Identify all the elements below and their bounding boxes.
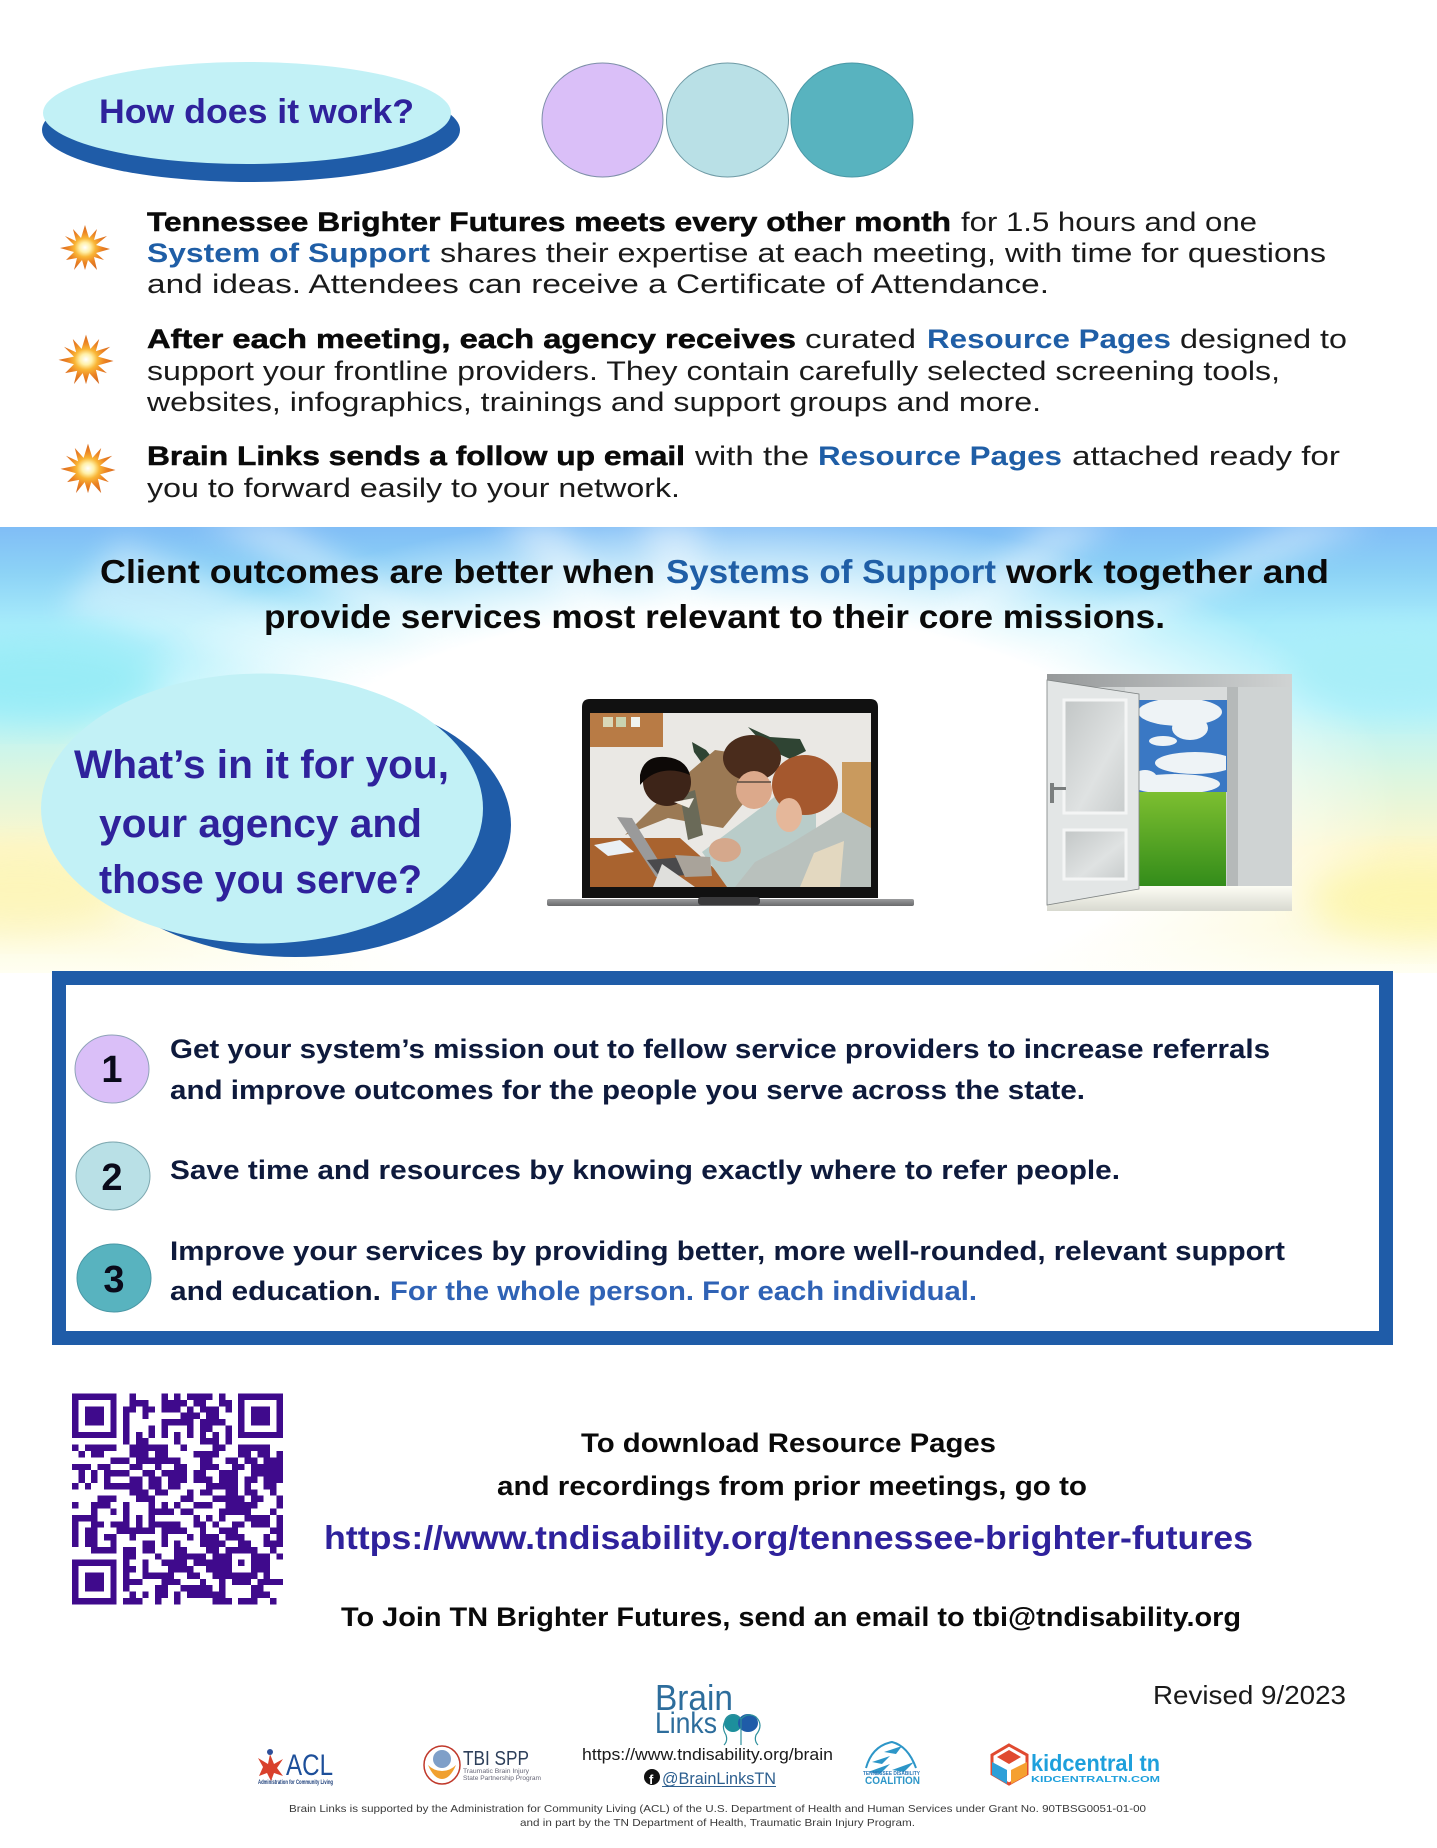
laptop base (547, 899, 914, 906)
resources call to action: To Join TN Brighter Futures, send an email to tbi@tndisability.org (341, 1602, 1241, 1632)
sky background band (0, 527, 1437, 973)
callout text: What’s in it for you, (74, 743, 449, 787)
icon: facebook (644, 1769, 660, 1787)
clouds (1139, 700, 1226, 792)
logo: kidcentral tn: kidcentral tn (1031, 1750, 1160, 1776)
Brain Links website and Facebook: https://www.tndisability.org/brain (582, 1745, 833, 1764)
benefit 2 (76, 1142, 1120, 1210)
logo: TBI SPP: TBI SPP (463, 1748, 529, 1770)
callout text (74, 743, 449, 902)
revision date: Revised 9/2023 (1153, 1680, 1346, 1710)
bullet 3: with the (694, 441, 809, 471)
icon: facebook: f (649, 1772, 654, 1787)
bullet 3: you to forward easily to your network. (147, 473, 680, 503)
bullet 2: designed to (1180, 324, 1347, 354)
benefit 2: Save time and resources by knowing exactly where to refer people. (170, 1155, 1120, 1185)
door panel (1047, 680, 1139, 905)
logo: Brain Links (655, 1677, 760, 1745)
benefit 3 (77, 1236, 1285, 1312)
number badge 1: 1 (101, 1049, 123, 1091)
heading: client outcomes: provide services most relevant to their core missions. (264, 598, 1165, 635)
logo: Tennessee Disability Coalition: TENNESSEE DISABILITY (863, 1771, 921, 1777)
icon: burst (59, 335, 114, 384)
bullet 2: After each meeting, each agency receives (147, 324, 796, 354)
heading: client outcomes: Client outcomes are better when (100, 553, 655, 590)
funding statement: Brain Links is supported by the Administration for Community Living (ACL) of the U.S. Department of Health and Human Services under Grant No. 90TBSG0051-01-00 (289, 1803, 1146, 1815)
image: laptop with three colleagues (547, 699, 914, 906)
icon: burst (60, 444, 116, 493)
resources call to action: and recordings from prior meetings, go to (497, 1471, 1087, 1501)
callout: How does it work? (42, 62, 460, 182)
bullet 1: Tennessee Brighter Futures meets every other month (147, 207, 951, 237)
decorative color circles (542, 63, 913, 177)
logo: ACL: Administration for Community Living (258, 1780, 333, 1786)
heading: client outcomes: work together and (1005, 553, 1329, 590)
bullet list: how it works (59, 207, 1347, 503)
bullet 3: Resource Pages (818, 441, 1062, 471)
bullet 3 (60, 441, 1340, 503)
bullet 2: support your frontline providers. They contain carefully selected screening tools, (147, 356, 1280, 386)
number badge 3 (77, 1244, 151, 1312)
logo: kidcentral tn (992, 1745, 1161, 1784)
benefit 1 (75, 1034, 1270, 1105)
bullet 1: shares their expertise at each meeting, with time for questions (440, 238, 1326, 268)
logo: Brain Links: Links (655, 1707, 717, 1740)
bullet 1: and ideas. Attendees can receive a Certificate of Attendance. (147, 269, 1049, 299)
benefit 3: and education. (170, 1276, 381, 1306)
resources call to action: To download Resource Pages (581, 1428, 996, 1458)
bullet 1 (60, 207, 1326, 299)
laptop screen photo (590, 713, 871, 887)
logo: kidcentral tn: KIDCENTRALTN.COM (1031, 1775, 1161, 1784)
bullet 1: System of Support (147, 238, 430, 268)
benefit 1: and improve outcomes for the people you serve across the state. (170, 1075, 1085, 1105)
benefit 3: Improve your services by providing better, more well-rounded, relevant support (170, 1236, 1285, 1266)
heading: How does it work?: How does it work? (99, 93, 414, 131)
callout: What's in it for you (41, 674, 511, 957)
callout text: your agency and (99, 802, 422, 846)
resources call to action (324, 1428, 1253, 1632)
logo: TBI SPP: Traumatic Brain Injury (463, 1769, 529, 1775)
panel: benefits frame (59, 978, 1386, 1338)
funding statement (289, 1803, 1146, 1829)
number badge 2 (76, 1142, 150, 1210)
callout text: those you serve? (99, 858, 422, 902)
bullet 2: curated (805, 324, 916, 354)
QR code (72, 1397, 283, 1601)
bullet 3: Brain Links sends a follow up email (147, 441, 685, 471)
link: resource URL: https://www.tndisability.org/tennessee-brighter-futures (324, 1519, 1253, 1556)
number badge 2: 2 (101, 1157, 123, 1199)
bullet 2: Resource Pages (927, 324, 1171, 354)
bullet 2: websites, infographics, trainings and support groups and more. (146, 387, 1041, 417)
image: open door to sky and grass (1047, 674, 1292, 911)
logo: Tennessee Disability Coalition: COALITION (865, 1775, 920, 1787)
logo: ACL (258, 1749, 333, 1786)
benefit 3: For the whole person. For each individual. (390, 1276, 977, 1306)
bullet 2 (59, 324, 1347, 417)
bullet 1: for 1.5 hours and one (961, 207, 1257, 237)
logo: TBI SPP: State Partnership Program (463, 1776, 541, 1782)
number badge 3: 3 (103, 1259, 125, 1301)
logo: ACL: ACL (286, 1749, 333, 1782)
icon: burst (60, 225, 110, 270)
heading: client outcomes (100, 553, 1329, 635)
Brain Links website and Facebook (582, 1745, 833, 1788)
Brain Links website and Facebook: @BrainLinksTN (662, 1769, 776, 1788)
logo: TBI SPP (424, 1746, 541, 1784)
heading: client outcomes: Systems of Support (666, 553, 996, 590)
logo: Brain Links: Brain (655, 1677, 733, 1718)
number badge 1 (75, 1035, 149, 1103)
funding statement: and in part by the TN Department of Health, Traumatic Brain Injury Program. (520, 1817, 915, 1829)
logo: Tennessee Disability Coalition (863, 1742, 921, 1787)
bullet 3: attached ready for (1072, 441, 1340, 471)
benefit 1: Get your system’s mission out to fellow service providers to increase referrals (170, 1034, 1270, 1064)
